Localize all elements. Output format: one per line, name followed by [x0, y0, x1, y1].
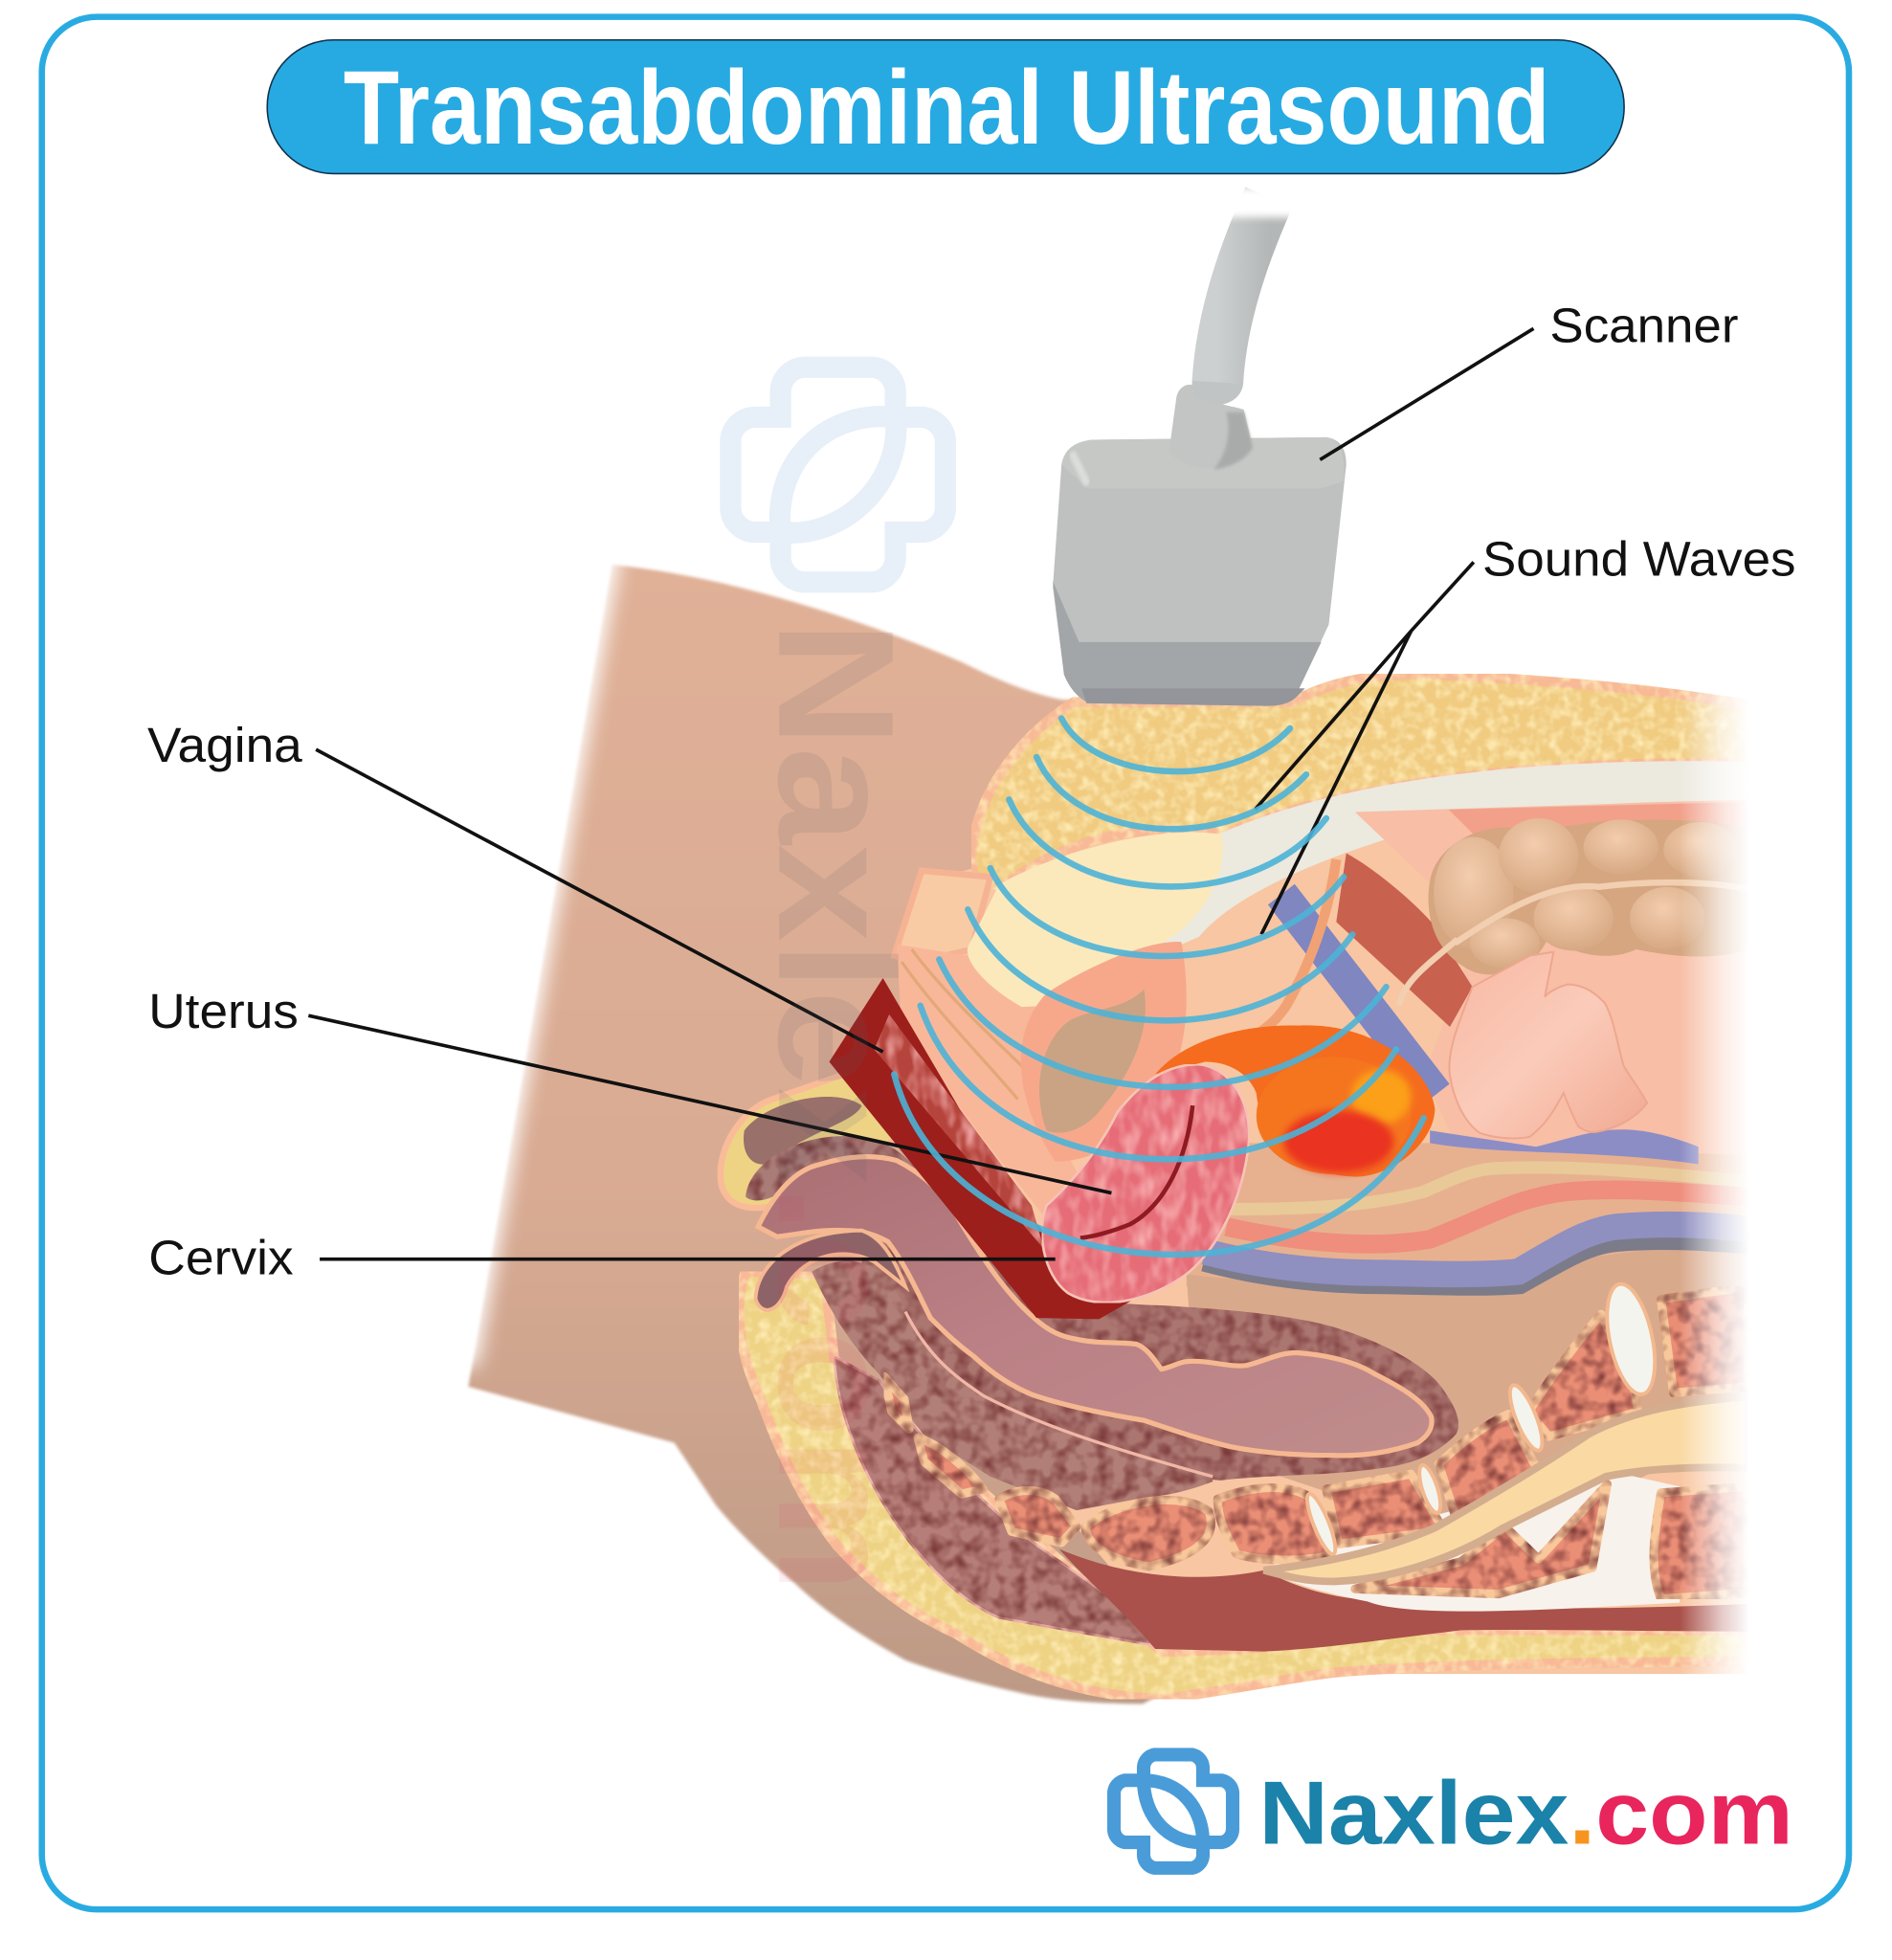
ovary outer: [1155, 1025, 1435, 1177]
transverse colon lumps: [1429, 818, 1748, 974]
title banner: [267, 40, 1624, 173]
watermark text: Naxlex .com: [744, 621, 928, 1592]
strain relief collar: [1169, 385, 1253, 469]
cable top fade: [1217, 188, 1330, 217]
ovary: [1155, 1025, 1435, 1177]
ovary inner follicle: [1257, 1057, 1412, 1174]
dark red vaginal wall: [829, 978, 1134, 1319]
ovary red spot: [1283, 1110, 1393, 1173]
lower pelvic cavity: [1187, 1236, 1748, 1549]
brand logo: [1114, 1754, 1793, 1868]
leader: scanner: [1320, 328, 1533, 459]
peach peritoneal right: [1355, 799, 1748, 1155]
anterior peach band: [897, 945, 1099, 1231]
leader: sound waves: [1255, 562, 1474, 934]
label: scanner: Scanner: [1549, 299, 1739, 353]
bladder wall: [1021, 942, 1187, 1162]
uterine cavity line: [1080, 1105, 1192, 1238]
nerve tube: [1230, 1168, 1748, 1210]
sound wave arcs: [894, 719, 1424, 1255]
intervertebral discs: [1302, 1280, 1663, 1557]
probe lower band: [1053, 581, 1322, 706]
lump base: [1429, 820, 1748, 974]
sacrum and coccyx vertebrae: [884, 1286, 1748, 1599]
colon band: [1399, 882, 1748, 1006]
white beyond fade: [1748, 662, 1842, 1681]
title pill: [267, 40, 1624, 173]
anal canal: [812, 1261, 1213, 1510]
levator muscle: [835, 1357, 1152, 1645]
perineal fold: [755, 1231, 905, 1310]
skin silhouette: [468, 565, 1299, 1704]
label: cervix: Cervix: [148, 1230, 294, 1284]
probe body: [1053, 437, 1347, 706]
ovary yellow spot: [1351, 1069, 1412, 1125]
anterior fat block: [894, 871, 991, 962]
pelvic vein branches: [1430, 1129, 1699, 1165]
labium dark fold: [744, 1097, 861, 1165]
small bowel loop: [1449, 952, 1647, 1138]
rectum wall: [849, 1162, 1458, 1481]
purple iliac vein: [1205, 1225, 1748, 1274]
bladder lumen: [1039, 990, 1146, 1133]
abdominal fascia: [1155, 761, 1761, 956]
red artery: [1226, 1190, 1748, 1244]
probe dark strip: [1081, 688, 1305, 706]
label: sound waves: Sound Waves: [1482, 532, 1796, 587]
brand wordmark: Naxlex .com: [1258, 1763, 1793, 1863]
vaginal fold wall: [746, 1136, 955, 1231]
probe left highlight: [1072, 453, 1088, 484]
right edge fade: [1680, 662, 1749, 1681]
pelvic floor muscle band: [1059, 1549, 1748, 1652]
title: Transabdominal Ultrasound: [344, 50, 1549, 167]
sacral canal: [1264, 1396, 1748, 1581]
blue vein: [1281, 895, 1436, 1094]
vagina canal: [758, 1157, 1432, 1456]
leader: cervix: [320, 1258, 1056, 1260]
leader: vagina: [316, 749, 883, 1052]
watermark logo: [730, 368, 946, 582]
skin left fade: [431, 544, 622, 1368]
upper fat pad near labia: [721, 1061, 918, 1208]
collar shade: [1213, 412, 1253, 470]
upper abdominal fat layer: [971, 674, 1761, 889]
orange tube: [1252, 859, 1336, 1039]
cable: [1217, 197, 1269, 382]
pelvic cross-section illustration: [431, 544, 1842, 1704]
vaginal wall speckled stripe: [874, 1014, 1044, 1249]
cream fat: [968, 833, 1223, 1007]
label: vagina: Vagina: [147, 718, 303, 772]
leader: uterus: [308, 1015, 1111, 1193]
probe top face: [1061, 437, 1344, 488]
red muscle: [1336, 854, 1473, 1027]
purple iliac vein shadow: [1205, 1235, 1748, 1281]
label: uterus: Uterus: [148, 984, 299, 1038]
icon: medical cross with leaf: [1114, 1754, 1233, 1868]
presacral white tissue: [1264, 1474, 1680, 1612]
mid cavity tan: [1187, 1143, 1748, 1286]
ultrasound probe: [1053, 188, 1347, 706]
outer buttock fat: [739, 1272, 1748, 1699]
anterior tan lines: [901, 949, 1031, 1100]
upper red strip: [1449, 802, 1748, 835]
cable end: [1192, 360, 1243, 405]
leader lines: [308, 328, 1533, 1259]
interior background: [949, 799, 1748, 1674]
uterus: [1042, 1064, 1249, 1303]
anal canal inner edge: [905, 1312, 1213, 1477]
